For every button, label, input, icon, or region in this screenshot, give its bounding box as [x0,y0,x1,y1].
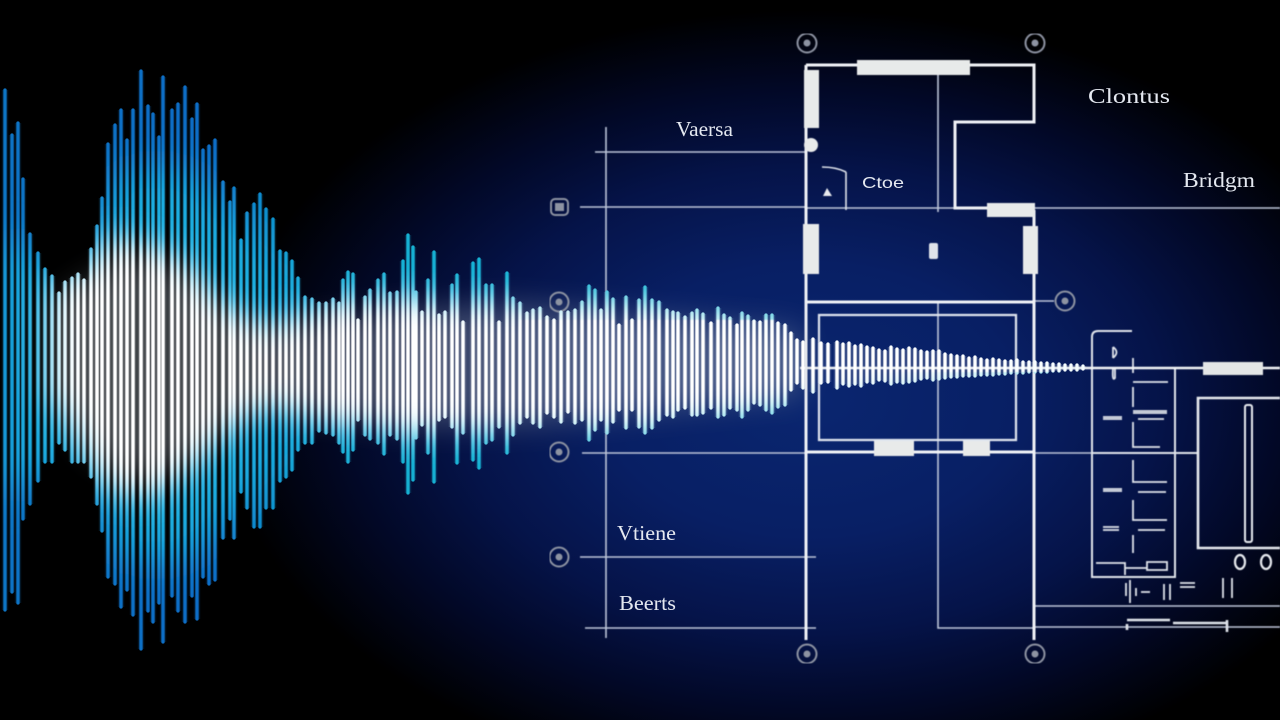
thick wall segments [803,60,1038,456]
reference markers [550,34,1074,664]
waveform [0,50,1100,670]
door symbol [822,167,938,259]
generator box [1198,398,1280,569]
building outline walls [806,65,1034,640]
label: Clontus: Clontus [1088,84,1170,108]
label: Ctoe: Ctoe [862,175,904,192]
thin grid and dimension lines [580,75,1280,638]
blueprint diagram [550,34,1280,664]
label: Beerts: Beerts [619,591,676,615]
label: Bridgm: Bridgm [1183,168,1255,192]
waveform core glow [60,255,800,480]
right panel schematic [1092,331,1232,632]
label: Vtiene: Vtiene [617,521,676,545]
signal wire [800,362,1280,375]
label: Vaersa: Vaersa [676,117,734,141]
